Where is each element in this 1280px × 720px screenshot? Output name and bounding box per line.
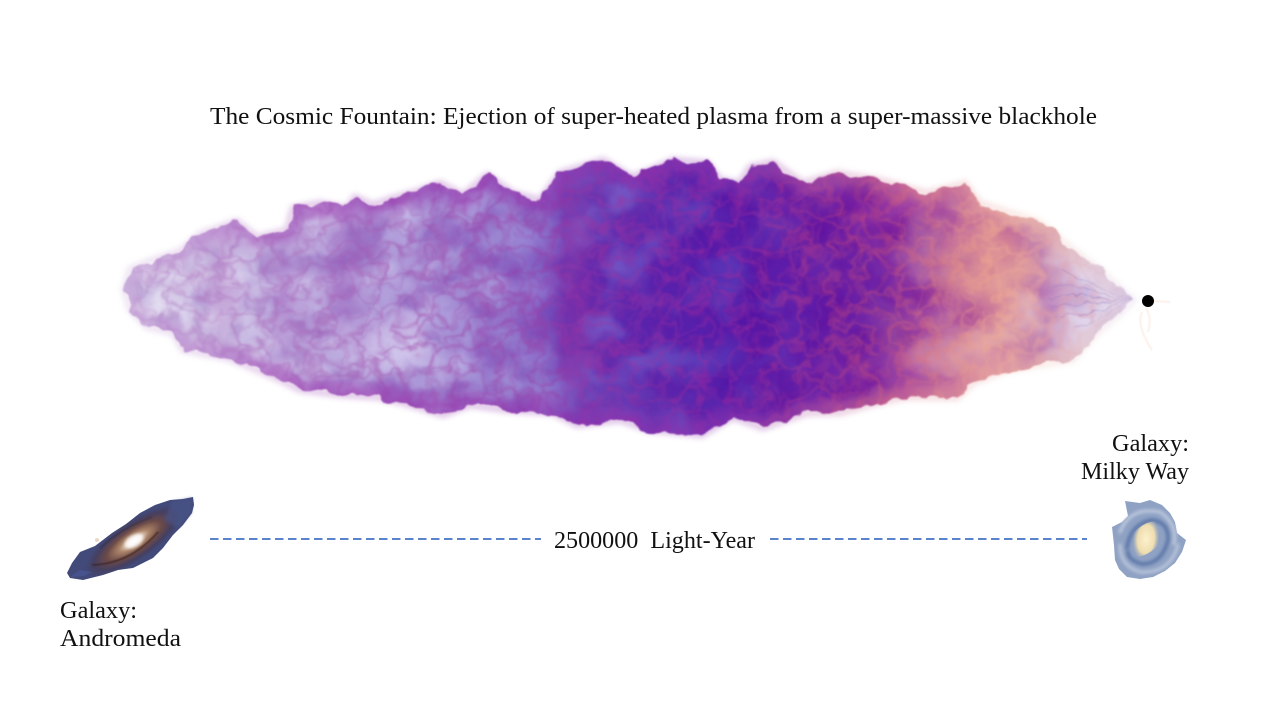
label: Milky Way: Galaxy:	[1112, 431, 1189, 457]
black hole	[1142, 295, 1154, 307]
galaxy: Andromeda image	[67, 497, 194, 580]
dashed line right	[770, 538, 1087, 540]
galaxy: Milky Way image	[1112, 500, 1186, 579]
dashed line left	[210, 538, 541, 540]
distance label: 2500000 Light-Year	[554, 528, 755, 554]
plume body	[122, 156, 1134, 437]
infographic canvas	[60, 106, 1189, 646]
label: Milky Way	[1081, 431, 1189, 485]
title: The Cosmic Fountain: Ejection of super-heated plasma from a super-massive blackhole	[210, 104, 1097, 130]
label: Andromeda	[60, 598, 181, 652]
label: Andromeda: Galaxy:	[60, 598, 137, 624]
soft outer halo	[124, 160, 1134, 435]
faint wisps around black hole	[1140, 301, 1170, 350]
label: Milky Way: Milky Way	[1081, 459, 1189, 485]
label: Andromeda: Andromeda	[60, 626, 181, 652]
plasma plume	[120, 154, 1136, 441]
